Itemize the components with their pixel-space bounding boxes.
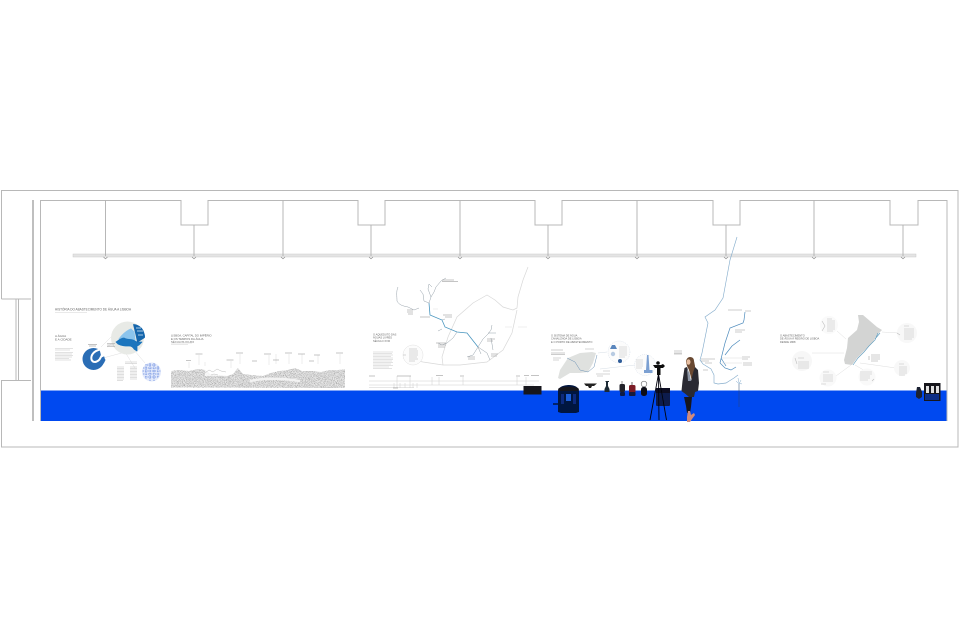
text block: intro xyxy=(55,348,73,360)
object: lantern 1 xyxy=(620,381,625,396)
heading: LISBOA, CAPITAL DO IMPÉRIO xyxy=(171,332,212,338)
title xyxy=(55,306,132,312)
heading: CANALIZADA DE LISBOA xyxy=(551,337,582,341)
heading: O AQUEDUTO DAS xyxy=(373,332,397,336)
object: tripod and case xyxy=(650,361,670,420)
timeline xyxy=(369,376,539,388)
shirt xyxy=(687,369,691,381)
building section outline xyxy=(2,190,958,447)
river lines on map xyxy=(567,355,597,372)
object: cabinet and figure xyxy=(916,383,940,401)
city boundary outline xyxy=(403,267,528,365)
legs xyxy=(684,397,692,413)
object: valve xyxy=(604,381,610,392)
label pointer xyxy=(722,358,742,363)
heading: ÁGUAS LIVRES xyxy=(373,336,392,340)
label: crescent map xyxy=(88,344,97,346)
object: lantern 2 xyxy=(629,382,636,396)
heading: a água e a cidade: A ÁGUA xyxy=(55,334,66,338)
map labels xyxy=(553,349,610,376)
circle 6 xyxy=(820,370,836,386)
central label xyxy=(869,355,880,361)
title: HISTÓRIA DO ABASTECIMENTO DE ÁGUA A LISBOA xyxy=(55,306,132,312)
sky outlines xyxy=(205,369,226,375)
heading: E O PORTO DE ABASTECIMENTO xyxy=(551,340,592,344)
jacket xyxy=(682,367,699,397)
machine: pump xyxy=(553,385,579,413)
heading: O SISTEMA DE ÁGUA xyxy=(551,334,578,338)
circular callout xyxy=(403,345,423,365)
inner rivers xyxy=(720,312,745,370)
heading: DE ÁGUA À REGIÃO DE LISBOA xyxy=(780,336,819,341)
branches xyxy=(397,278,496,360)
heading: E OS TEMPOS DA ÁGUA xyxy=(171,337,204,341)
connector lines xyxy=(100,324,145,368)
hair and head xyxy=(686,357,695,381)
heading: a água e a cidade: E A CIDADE xyxy=(55,338,72,342)
connector xyxy=(598,352,635,369)
gray region map xyxy=(558,352,596,379)
river system xyxy=(700,237,738,384)
map labels xyxy=(407,280,498,359)
circle: tower xyxy=(634,354,656,376)
connectors xyxy=(812,331,899,376)
circle: reservoirs xyxy=(608,341,630,363)
callout labels xyxy=(186,353,343,361)
circle 3 xyxy=(792,351,812,371)
labels xyxy=(674,310,752,370)
delta detail xyxy=(736,378,742,384)
panel: Tagus region map xyxy=(674,237,752,407)
shoes xyxy=(687,411,695,422)
rivers on map xyxy=(853,333,880,365)
line over band xyxy=(738,384,740,407)
circle 5 xyxy=(858,368,876,386)
face xyxy=(686,359,690,365)
circle 1 xyxy=(820,316,838,334)
black equipment box xyxy=(524,386,542,394)
circle 4 xyxy=(894,360,910,376)
label: map xyxy=(107,344,115,346)
heading: SÉCULOS XV-XIX xyxy=(171,339,194,344)
engraved panorama xyxy=(171,368,345,388)
panel: water and the city xyxy=(55,322,161,382)
person standing xyxy=(682,357,699,422)
icon: blue crescent map xyxy=(82,347,107,370)
suspended rail with hangers xyxy=(73,200,916,259)
panel: Lisbon panorama xyxy=(171,332,345,389)
panel: aqueduct map xyxy=(369,267,539,388)
panel: regional supply xyxy=(780,315,917,386)
heading: O ABASTECIMENTO xyxy=(780,334,805,338)
callout text xyxy=(403,349,418,361)
gray region map xyxy=(844,315,882,365)
text block xyxy=(373,352,393,368)
panorama callouts xyxy=(189,354,340,368)
object: lamp xyxy=(641,381,647,396)
blue floor band xyxy=(40,390,947,421)
text columns xyxy=(117,362,137,380)
circle 2 xyxy=(897,323,917,343)
object: drone-shaped fixture xyxy=(584,384,597,388)
heading: SÉCULO XVIII xyxy=(373,338,390,343)
map circle: aquifer xyxy=(111,322,145,354)
date label xyxy=(551,350,565,354)
light labels xyxy=(433,309,527,327)
subtitle lines xyxy=(171,343,192,344)
river network main xyxy=(429,303,478,347)
panel: supply system map xyxy=(551,334,656,379)
heading: DESDE 1868 xyxy=(780,340,796,344)
blue pattern circle xyxy=(142,362,161,382)
